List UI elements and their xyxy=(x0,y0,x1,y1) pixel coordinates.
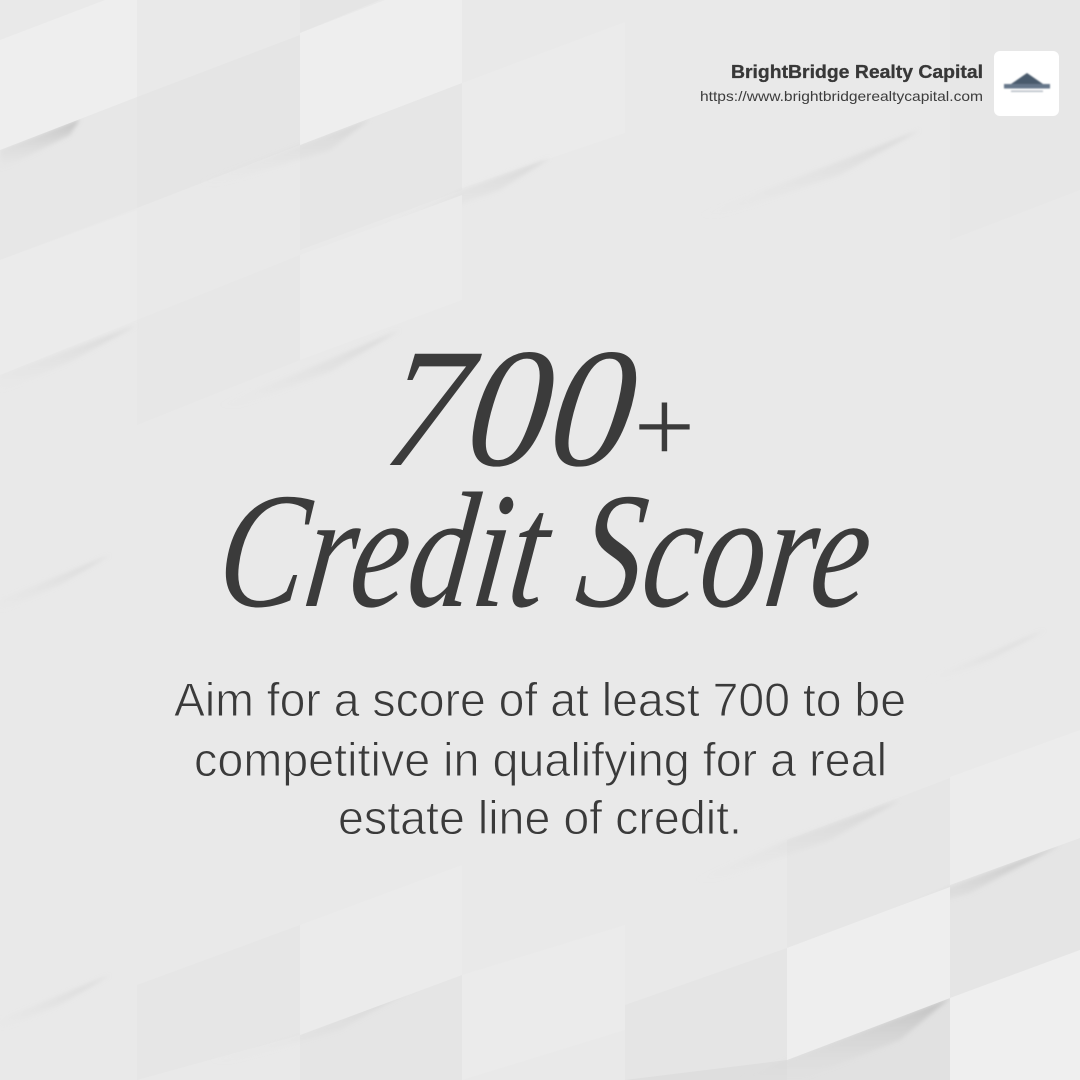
brand url: https://www.brightbridgerealtycapital.com xyxy=(700,88,983,104)
description text: estate line of credit. xyxy=(338,791,742,844)
brand name: BrightBridge Realty Capital xyxy=(731,61,983,82)
description text: Aim for a score of at least 700 to be xyxy=(174,673,906,726)
title: Credit Score xyxy=(210,459,882,642)
logo tile xyxy=(994,51,1059,116)
description text xyxy=(174,673,906,844)
title: 700 xyxy=(375,314,647,502)
icon: roof logo xyxy=(1004,73,1050,92)
brand header xyxy=(700,51,1059,116)
title xyxy=(210,314,882,642)
description text: competitive in qualifying for a real xyxy=(194,733,887,786)
title: + xyxy=(627,368,700,485)
